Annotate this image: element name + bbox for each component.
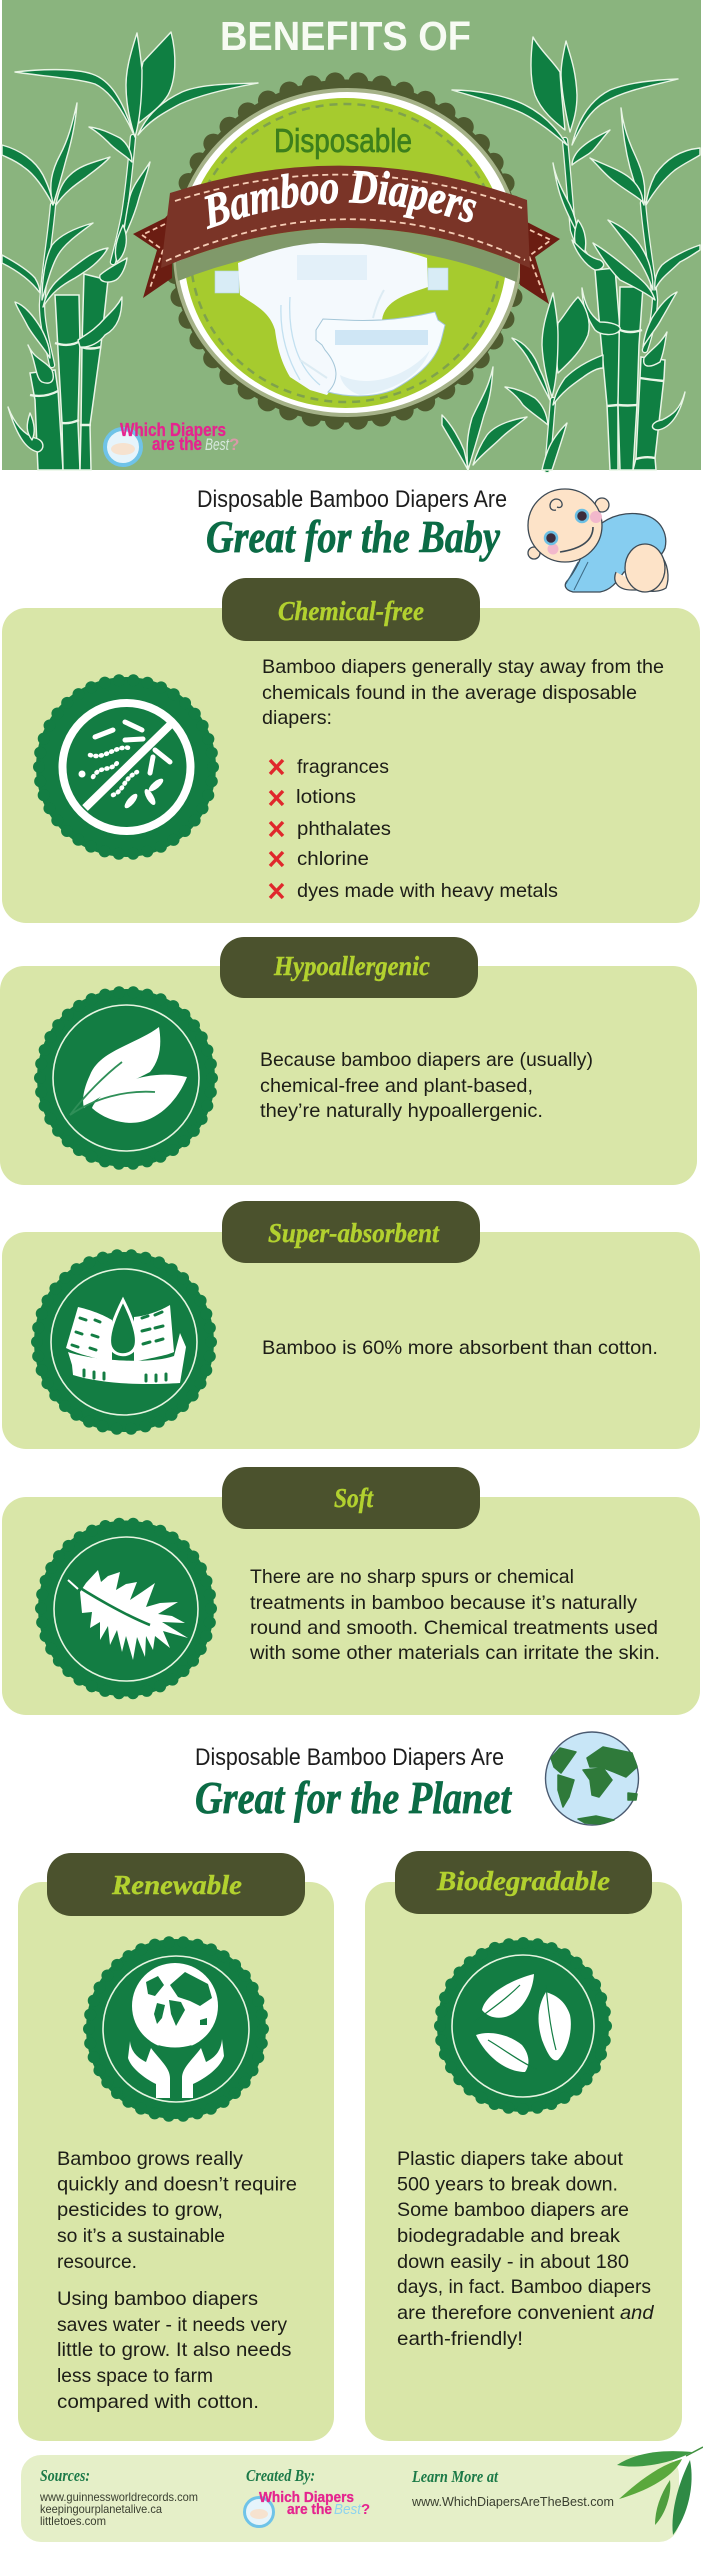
text: renewable: pesticides to grow, [57,2199,223,2221]
learn more [411,2467,614,2509]
text: renewable: Using bamboo diapers [57,2288,258,2310]
created by: Best [334,2501,362,2518]
list: chemicals avoided: chlorine [297,848,369,870]
icon: absorbent pad badge [34,1252,214,1432]
icon: three leaves badge [437,1940,609,2112]
text: disposable: Disposable [274,122,412,159]
text: biodegradable: Plastic diapers take about [397,2148,624,2170]
text: renewable: so it’s a sustainable [57,2225,225,2247]
pill heading [47,1853,305,1916]
panel: renewable [18,1853,334,2441]
text: biodegradable: biodegradable and break [397,2225,620,2247]
sources: littletoes.com [40,2514,106,2528]
text: super-absorbent: Bamboo is 60% more absorbent than cotton. [262,1337,658,1359]
pill heading: Soft [334,1483,374,1513]
pill heading: Renewable [111,1870,242,1900]
text: biodegradable: down easily - in about 180 [397,2251,629,2273]
pill heading: Super-absorbent [268,1218,440,1248]
text: hypoallergenic: chemical-free and plant-based, [260,1075,533,1097]
title: benefits of: BENEFITS OF [220,13,471,59]
list: chemicals avoided: dyes made with heavy metals [297,880,558,902]
list: chemicals avoided [270,756,558,902]
logo: which diapers are the best: are the [152,434,202,454]
created by [244,2466,370,2526]
text: biodegradable: are therefore convenient and [397,2302,655,2324]
heading: great for the planet: Disposable Bamboo Diapers Are [195,1744,504,1771]
panel: super-absorbent [2,1201,700,1449]
text: soft: with some other materials can irritate the skin. [249,1642,660,1664]
bamboo right [442,37,700,470]
pill heading [222,1467,480,1529]
heading: great for the baby: Great for the Baby [206,512,501,562]
sources: keepingourplanetalive.ca [40,2502,162,2516]
text: renewable [57,2148,297,2413]
text: soft [249,1566,660,1664]
icon: globe [546,1732,638,1825]
heading: great for the planet: Great for the Planet [195,1773,512,1823]
created by: ? [361,2501,370,2518]
pill heading [222,1201,480,1263]
sources: Sources: [40,2466,90,2485]
icon: leaves badge [37,989,215,1167]
icon: bamboo leaves [617,2447,703,2535]
created by: Which Diapers [259,2489,354,2506]
learn more: www.WhichDiapersAreTheBest.com [411,2494,614,2509]
text: soft: There are no sharp spurs or chemical [250,1566,574,1588]
text: renewable: saves water - it needs very [57,2314,287,2336]
text: biodegradable: days, in fact. Bamboo diapers [397,2276,651,2298]
logo: which diapers are the best [105,420,239,465]
text: hypoallergenic: Because bamboo diapers are (usually) [260,1049,593,1071]
logo: which diapers are the best: Which Diapers [120,420,226,440]
icon: crawling baby [528,489,668,592]
text: soft: treatments in bamboo because it’s naturally [250,1592,637,1614]
logo: which diapers are the best: Best [205,435,230,454]
text: biodegradable [397,2148,655,2350]
pill heading [395,1851,652,1914]
panel: soft [2,1467,700,1715]
heading: great for the baby [197,486,507,562]
text: renewable: quickly and doesn’t require [57,2174,297,2196]
text: renewable: resource. [57,2251,137,2273]
text: renewable: little to grow. It also needs [57,2339,292,2361]
footer [21,2447,703,2542]
icon: diaper [215,243,448,396]
text: intro [262,656,664,729]
panel: chemical-free [2,578,700,923]
heading: great for the planet [195,1744,512,1823]
text: renewable: compared with cotton. [57,2391,259,2413]
heading: great for the baby: Disposable Bamboo Diapers Are [197,486,507,513]
ribbon [133,166,560,304]
sources: www.guinnessworldrecords.com [39,2490,198,2504]
text: renewable: Bamboo grows really [57,2148,243,2170]
icon: globe in hands badge [86,1939,266,2119]
text: renewable: less space to farm [57,2365,213,2387]
icon: no chemicals badge [36,677,216,857]
learn more: Learn More at [411,2467,499,2486]
text: hypoallergenic: they’re naturally hypoallergenic. [260,1100,543,1122]
text: biodegradable: Some bamboo diapers are [397,2199,629,2221]
text: bamboo diapers: Bamboo Diapers [204,170,477,230]
pill heading [220,937,478,998]
bamboo left [2,32,258,470]
created by: are the [287,2501,332,2518]
pill heading: Hypoallergenic [273,951,430,981]
created by: Created By: [246,2466,315,2485]
text: hypoallergenic [260,1049,593,1122]
text: intro: diapers: [262,707,332,729]
text: soft: round and smooth. Chemical treatments used [250,1617,658,1639]
list: chemicals avoided: fragrances [297,756,389,778]
pill heading: Biodegradable [436,1866,610,1896]
text: biodegradable: 500 years to break down. [397,2174,618,2196]
pill heading [222,578,480,641]
badge: scalloped oval [161,80,530,422]
panel: hypoallergenic [0,937,697,1185]
hero banner [1,0,701,474]
panel: biodegradable [365,1851,682,2441]
sources [39,2466,198,2528]
logo: which diapers are the best: ? [229,435,239,454]
text: intro: Bamboo diapers generally stay away from the [262,656,664,678]
icon: feather badge [38,1520,214,1696]
text: intro: chemicals found in the average disposable [262,682,637,704]
list: chemicals avoided: lotions [296,786,356,808]
list: chemicals avoided: phthalates [297,818,391,840]
pill heading: Chemical-free [278,596,424,626]
text: biodegradable: earth-friendly! [397,2328,523,2350]
